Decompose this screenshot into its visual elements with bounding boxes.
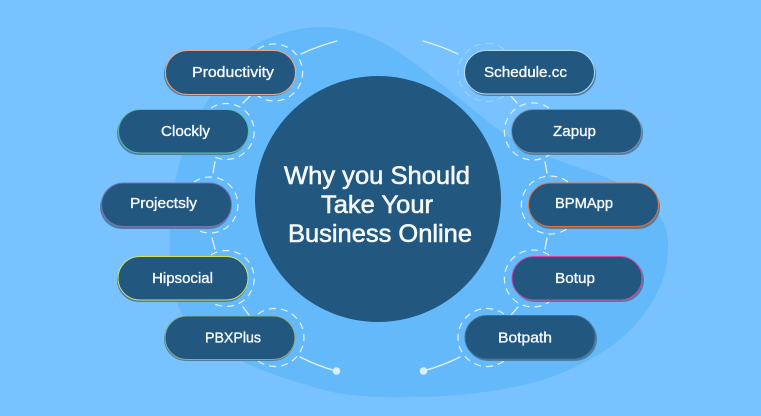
pill: Productivity: Productivity (192, 65, 275, 81)
title: Take Your (321, 191, 433, 219)
pill: BPMApp: BPMApp (555, 196, 613, 212)
pill: Projectsly: Projectsly (130, 196, 198, 212)
pill: Clockly (117, 110, 248, 155)
decorative curve bottom left with dot (300, 357, 340, 375)
pill: Schedule.cc (464, 50, 596, 96)
pill: Botpath: Botpath (498, 330, 552, 346)
connectors between pills (212, 95, 547, 315)
title: Why you Should (284, 162, 470, 190)
pill: Hipsocial (117, 256, 248, 302)
pill: Zapup: Zapup (553, 124, 596, 140)
decorative curve top right (423, 41, 458, 54)
title (284, 162, 472, 248)
pill: Productivity (164, 50, 296, 96)
pill: Botup (512, 256, 644, 302)
decorative curve top left (301, 41, 337, 54)
pill: PBXPlus: PBXPlus (205, 330, 261, 346)
pill: Botup: Botup (555, 271, 595, 287)
pill: Botpath (465, 316, 597, 361)
pill: Zapup (512, 110, 643, 155)
central circle (255, 76, 501, 322)
pill: Schedule.cc: Schedule.cc (484, 65, 567, 81)
decorative curve bottom right with dot (420, 357, 460, 375)
pill: BPMApp (528, 183, 660, 229)
pill: PBXPlus (164, 316, 295, 361)
pill: Clockly: Clockly (161, 124, 211, 140)
dashed arcs around pill ends (194, 44, 568, 367)
title: Business Online (288, 220, 472, 248)
pill: Projectsly (100, 183, 232, 229)
pill: Hipsocial: Hipsocial (152, 271, 213, 287)
background blob (170, 27, 668, 397)
